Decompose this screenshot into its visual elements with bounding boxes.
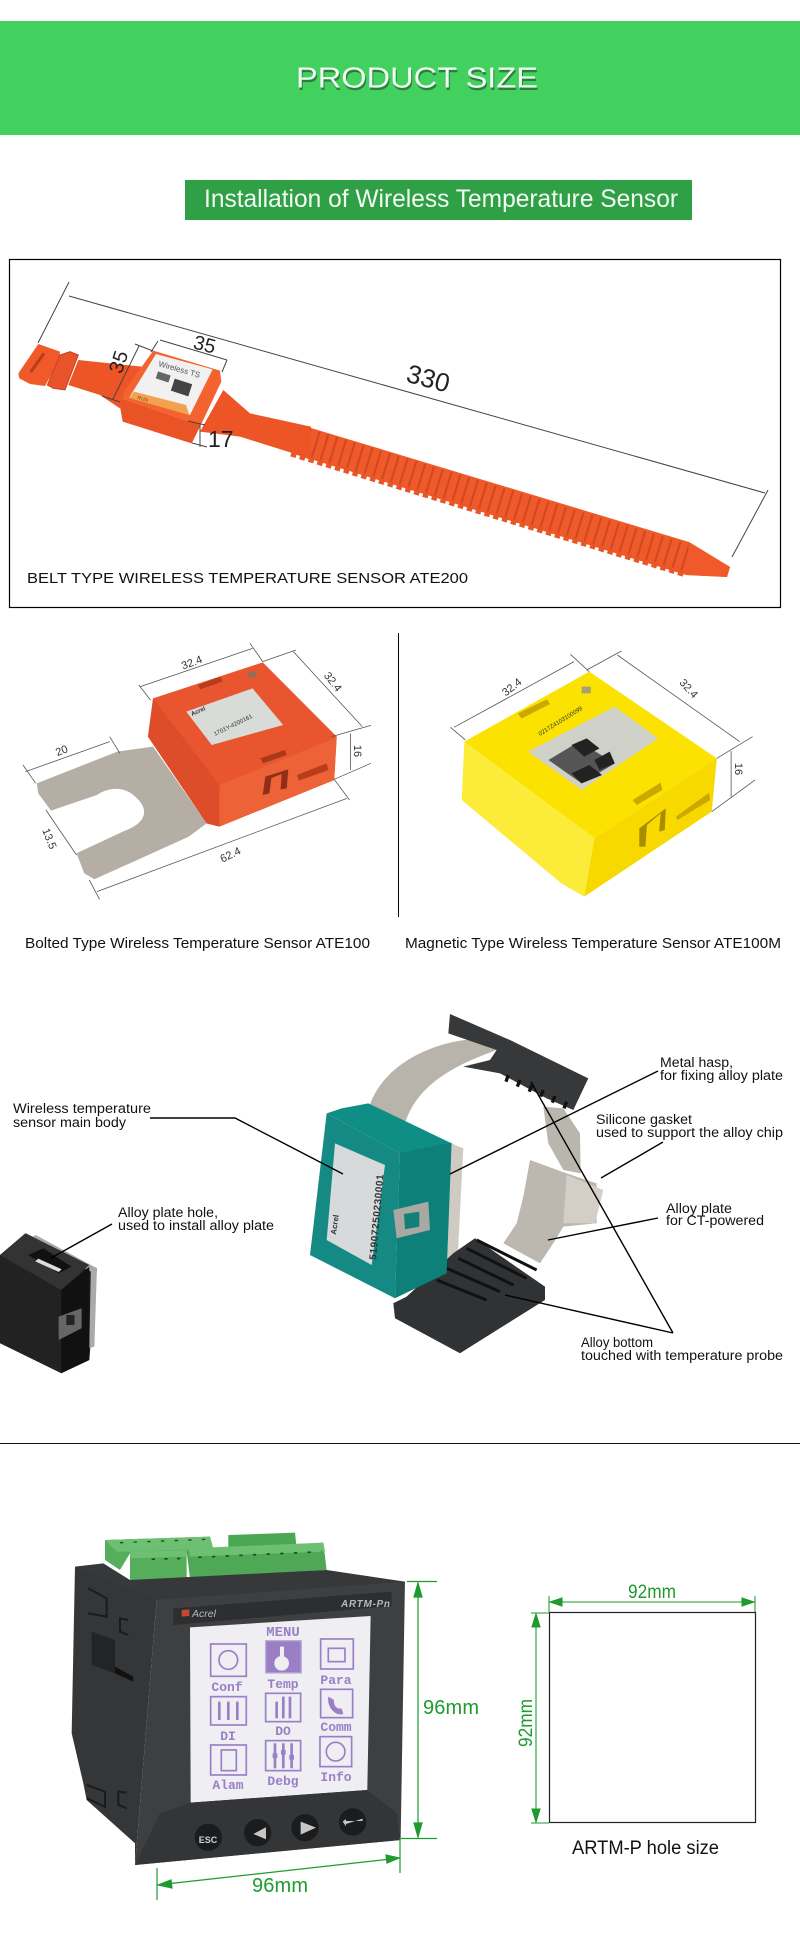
- annotation labels: for CT-powered: [666, 1213, 764, 1228]
- height and width dimensions: [157, 1582, 437, 1900]
- bolted dimension values: 62.4: [218, 845, 243, 865]
- belt strap ribs: [291, 425, 730, 577]
- screen and brand text: Temp: [267, 1677, 299, 1692]
- hole dimension values: 92mm: [628, 1582, 676, 1603]
- subtitle banner: Installation of Wireless Temperature Sensor: [204, 185, 678, 213]
- magnetic dimension values: [500, 676, 744, 775]
- front buttons: [195, 1808, 366, 1851]
- magnetic sensor product: [462, 672, 717, 897]
- title: PRODUCT SIZE: [296, 62, 538, 94]
- screen and brand text: [191, 1599, 391, 1845]
- screen and brand text: Conf: [211, 1680, 243, 1695]
- dimension lines: [38, 282, 768, 557]
- belt label text: [136, 359, 201, 404]
- screen and brand text: DO: [275, 1724, 291, 1739]
- device dimension values: 96mm: [423, 1697, 479, 1719]
- dimension values: 35: [191, 332, 218, 359]
- annotation labels: for fixing alloy plate: [660, 1068, 783, 1083]
- bolted dimension values: 13.5: [39, 827, 58, 851]
- bolted label text: [190, 706, 254, 738]
- annotation labels: used to support the alloy chip: [596, 1125, 783, 1140]
- bolted dimension values: 32.4: [321, 670, 344, 694]
- device dimension values: [252, 1697, 479, 1897]
- device body: [72, 1533, 405, 1865]
- annotation labels: used to install alloy plate: [118, 1218, 274, 1233]
- screen and brand text: Comm: [320, 1720, 352, 1735]
- hole dimension lines: [531, 1596, 755, 1823]
- dimension values: [105, 332, 453, 452]
- caption: BELT TYPE WIRELESS TEMPERATURE SENSOR ATE200: [27, 571, 468, 587]
- dimension values: 330: [403, 358, 453, 398]
- device label text: [329, 1173, 387, 1260]
- annotation labels: Silicone gasket: [596, 1112, 692, 1127]
- belt label text: RUN: [136, 395, 149, 404]
- annotation labels: Alloy bottom: [581, 1335, 653, 1350]
- magnetic dimension lines: [451, 651, 755, 812]
- screen and brand text: Debg: [267, 1774, 299, 1789]
- annotation labels: sensor main body: [13, 1115, 126, 1130]
- bolted dimension values: [39, 654, 363, 865]
- screen and brand text: ARTM-Pn: [340, 1599, 391, 1610]
- hole dimension values: [516, 1582, 676, 1747]
- caption: Magnetic Type Wireless Temperature Sensor ATE100M: [405, 935, 781, 952]
- dimension values: 17: [208, 426, 234, 452]
- panel: belt type sensor: [10, 260, 780, 608]
- CT-powered sensor product: [310, 1014, 603, 1353]
- caption: Bolted Type Wireless Temperature Sensor ATE100: [25, 935, 370, 952]
- screen and brand text: DI: [220, 1729, 236, 1744]
- magnetic dimension values: 32.4: [677, 677, 700, 701]
- belt sensor head: [18, 344, 311, 460]
- bolted sensor product: [37, 662, 337, 879]
- panel: magnetic sensor: [405, 651, 781, 952]
- header band: [0, 21, 800, 135]
- annotation labels: Alloy plate hole,: [118, 1205, 218, 1220]
- black sensor module: [0, 1233, 97, 1373]
- bolted dimension values: 32.4: [180, 654, 204, 672]
- annotation labels: Metal hasp,: [660, 1055, 733, 1070]
- annotation labels: touched with temperature probe: [581, 1348, 783, 1363]
- annotation labels: Alloy plate: [666, 1201, 732, 1216]
- device label text: Acrel: [329, 1214, 341, 1235]
- hole dimension values: 92mm: [516, 1699, 537, 1747]
- green terminal blocks: [105, 1533, 327, 1580]
- screen and brand text: Alam: [212, 1778, 244, 1793]
- subtitle banner: [185, 180, 692, 220]
- annotation labels: [13, 1055, 783, 1363]
- device dimension values: 96mm: [252, 1875, 308, 1897]
- magnetic dimension values: 16: [732, 763, 744, 775]
- title: PRODUCT SIZE: [297, 65, 539, 97]
- screen and brand text: ESC: [199, 1835, 218, 1845]
- annotation labels: Wireless temperature: [13, 1101, 151, 1116]
- panel: CT-powered sensor exploded view: [0, 1014, 783, 1373]
- device label text: 51907250230001: [368, 1173, 387, 1260]
- screen and brand text: Acrel: [191, 1608, 217, 1620]
- panel: hole size diagram: [516, 1582, 756, 1859]
- screen and brand text: Para: [320, 1673, 352, 1688]
- screen icons: [211, 1639, 353, 1775]
- screen and brand text: Info: [320, 1770, 352, 1785]
- bolted dimension values: 20: [54, 743, 70, 759]
- bolted dimension values: 16: [351, 745, 363, 757]
- panel: bolted sensor: [23, 643, 371, 952]
- belt label text: Wireless TS: [157, 359, 201, 380]
- caption: ARTM-P hole size: [572, 1838, 719, 1859]
- dimension values: 35: [105, 348, 133, 376]
- panel: ARTM-Pn device: [72, 1533, 479, 1900]
- magnetic label text: 0217Z4103100099: [538, 706, 584, 738]
- bolted dimension lines: [23, 643, 371, 899]
- leader lines: [51, 1071, 673, 1333]
- bolted label text: 1701Y-4200161: [213, 714, 254, 738]
- screen and brand text: MENU: [266, 1625, 300, 1641]
- bolted label text: Acrel: [190, 706, 207, 718]
- magnetic dimension values: 32.4: [500, 676, 524, 699]
